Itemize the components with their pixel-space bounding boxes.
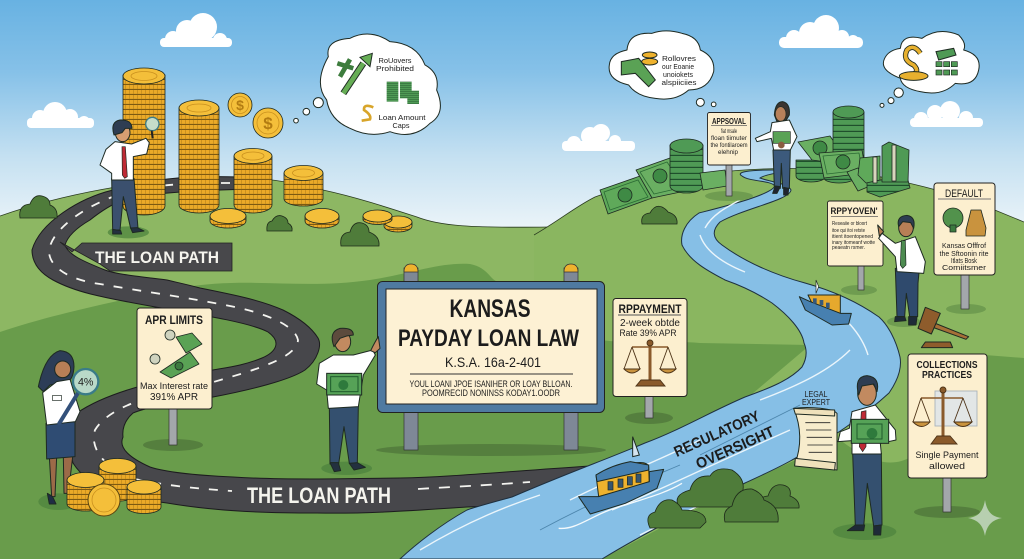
thought cloud 2 labels: our Eoanie	[662, 62, 694, 71]
sign: repayment: RPPAYMENT	[618, 304, 682, 316]
sign: APR limits: APR LIMITS	[145, 313, 203, 327]
billboard: Kansas Payday Loan Law: KANSAS	[450, 295, 530, 323]
sign: APR limits: 391% APR	[150, 392, 198, 403]
legal expert label: EXPERT	[802, 398, 830, 407]
sparkle watermark	[968, 500, 1002, 536]
sign: default	[934, 183, 995, 314]
boat: upper river	[799, 280, 851, 325]
billboard: Kansas Payday Loan Law: K.S.A. 16a-2-401	[445, 354, 541, 370]
gavel	[918, 307, 969, 348]
sign: approval	[705, 112, 753, 201]
sky background	[0, 0, 1024, 240]
sign: collections practices: Single Payment	[916, 450, 979, 461]
sign: approval: the fontilaroem	[710, 143, 748, 149]
sign: approval: fiat msale	[721, 129, 737, 135]
legal expert label	[802, 390, 830, 407]
sign: collections practices: COLLECTIONS	[916, 359, 978, 371]
sign: collections practices	[908, 354, 987, 518]
sign: repayment, second: inary itomeanf wotte	[832, 240, 875, 246]
sign: repayment, second: itient itoentopened	[832, 234, 873, 240]
sign: default: Comiitsmer	[942, 263, 987, 272]
coin stacks	[123, 68, 412, 232]
sign: repayment, second: RPPYOVEN'	[830, 206, 878, 216]
sign: repayment: Rate 39% APR	[620, 328, 677, 338]
green cash and coin stacks	[600, 106, 910, 214]
thought cloud 2 labels: alspiiciies	[662, 78, 697, 87]
road: the loan path	[32, 177, 590, 513]
person: legal expert with scroll	[794, 376, 896, 540]
roadside banner: the loan path	[60, 242, 232, 271]
flying coin dollar signs: $	[236, 97, 244, 113]
thought cloud: rollovers and disclosure	[609, 31, 716, 107]
left coin pile	[67, 458, 161, 516]
hills: back left and back right	[0, 168, 1024, 559]
icon: cash and coins	[150, 330, 202, 378]
flying coin dollar signs: $	[263, 114, 273, 133]
thought cloud 2 labels	[662, 54, 697, 87]
sign: repayment, second: peaeatn rsmer.	[832, 245, 865, 251]
river: regulatory oversight	[400, 170, 901, 559]
sign: repayment: 2-week obtde	[620, 318, 680, 329]
sign: collections practices: PRACTICES	[922, 369, 972, 381]
bushes	[20, 196, 799, 528]
roadside banner: the loan path: THE LOAN PATH	[95, 248, 219, 267]
sign: default: Kansas Offfrof	[942, 241, 987, 250]
sign: repayment, second: Reseaiie or bloort	[832, 221, 867, 227]
sign: collections practices: allowed	[929, 461, 965, 472]
thought cloud 1 labels: Caps	[392, 121, 410, 130]
billboard: Kansas Payday Loan Law: YOUL LOANI JPOE ISANIHER OR LOAY BLLOAN.	[410, 379, 572, 389]
sign: repayment, second: itoe qui itoi retste	[832, 228, 865, 234]
sign: default: DEFAULT	[945, 188, 983, 200]
legal expert label: LEGAL	[804, 390, 828, 399]
person: man inspecting coins	[100, 117, 159, 238]
icon: scales over document	[913, 387, 977, 444]
flying coin dollar signs	[236, 97, 273, 133]
thought cloud: snake dollar and cash	[880, 32, 979, 107]
person: man pointing at billboard	[317, 328, 380, 475]
boat: lower river	[559, 437, 682, 528]
sign: default: Itlats Bosk	[951, 256, 977, 265]
thought cloud 2 labels: Rollovres	[662, 54, 696, 63]
river label: regulatory oversight: OVERSIGHT	[693, 423, 777, 473]
thought cloud: rollovers prohibited and loan caps	[294, 34, 440, 134]
sign: default: the Sftoonin rite	[940, 249, 988, 258]
road label: the loan path: THE LOAN PATH	[247, 483, 391, 508]
billboard: Kansas Payday Loan Law	[376, 264, 606, 456]
billboard: Kansas Payday Loan Law: POOMRECID NONINSS KODAY1.OODR	[422, 388, 560, 398]
thought cloud 1 labels: RoUovers	[378, 56, 412, 65]
sign: approval: floan tiimuter	[711, 136, 747, 142]
sign: APR limits: Max Interest rate	[140, 381, 208, 391]
thought cloud 1 labels: Prohibited	[376, 64, 414, 73]
icon: scales of justice	[624, 340, 676, 386]
person: woman with magnifying glass	[38, 351, 98, 510]
thought cloud 1 labels	[376, 56, 426, 130]
thought cloud 1 labels: Loan Amount	[378, 113, 426, 122]
sign: approval: elehnip	[718, 150, 739, 156]
darker foreground meadows	[0, 264, 1024, 559]
clouds	[27, 13, 983, 151]
thought cloud 2 labels: unoiokets	[663, 70, 693, 79]
sign: approval: APPSOVAL	[712, 117, 746, 126]
billboard: Kansas Payday Loan Law: PAYDAY LOAN LAW	[398, 325, 579, 352]
river label: regulatory oversight: REGULATORY	[671, 408, 762, 461]
icon: tree and coin statue	[943, 208, 986, 236]
sign: APR limits	[137, 308, 212, 451]
icon: scroll	[794, 408, 837, 470]
person: woman with cash	[755, 102, 797, 195]
person: woman with magnifying glass: 4%	[78, 376, 94, 388]
person: man pointing at repayment sign	[878, 215, 925, 327]
sign: repayment	[613, 298, 687, 424]
sign: repayment, second	[828, 201, 883, 295]
